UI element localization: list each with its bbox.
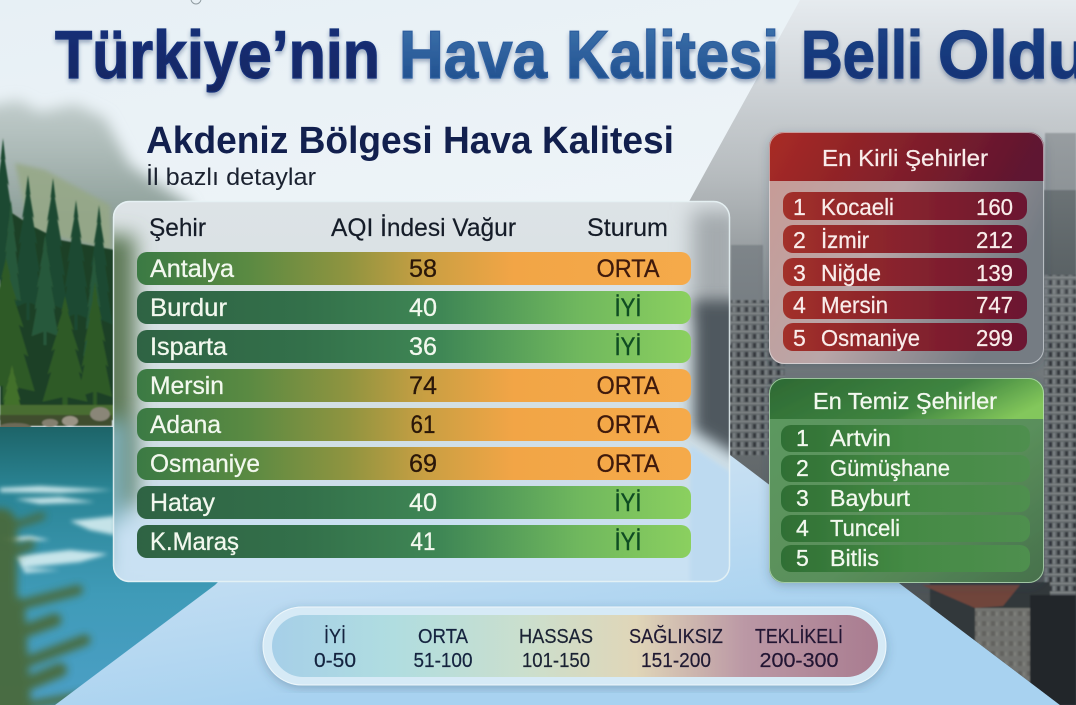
row 2 (783, 225, 1027, 253)
title: Türkiye’nin (55, 17, 380, 93)
row: Antalya: 58 (409, 255, 437, 283)
row: Burdur (137, 291, 691, 324)
legend item: HASSAS (519, 626, 593, 672)
row: Isparta: İYİ (614, 332, 642, 361)
legend item: HASSAS: HASSAS (519, 626, 593, 648)
row: Osmaniye: Osmaniye (150, 450, 260, 478)
row 4: Mersin (821, 292, 888, 318)
legend item: İYİ: İYİ (324, 625, 346, 648)
table header: AQI İndesi Vağur (331, 213, 516, 242)
legend item: SAĞLIKSIZ: SAĞLIKSIZ (629, 625, 723, 648)
row: Isparta: Isparta (150, 333, 227, 361)
table header (149, 213, 668, 242)
panel: most polluted cities (769, 132, 1044, 364)
row: K.Maraş (137, 525, 691, 558)
legend item: ORTA: 51-100 (414, 650, 472, 672)
row: K.Maraş: İYİ (614, 527, 642, 556)
lake (0, 427, 218, 705)
row: Adana: ORTA (596, 411, 660, 439)
table header: Sturum (587, 214, 668, 242)
row 5 (781, 545, 1030, 572)
foreground pine (0, 516, 105, 705)
panel: city table (95, 201, 745, 590)
panel body (769, 132, 1044, 364)
row: Hatay: İYİ (614, 488, 642, 517)
row 5: 5 (793, 325, 806, 351)
fog (680, 0, 1076, 705)
row 1: 1 (796, 425, 809, 451)
row: Mersin: 74 (409, 372, 437, 400)
row 4 (783, 291, 1027, 319)
legend item: TEKLİKELİ: TEKLİKELİ (755, 625, 843, 648)
icon: faint top logo (191, 0, 201, 4)
row 4: 4 (793, 292, 806, 318)
row 5: Osmaniye (821, 325, 920, 351)
row 1: 1 (793, 194, 806, 220)
row: Osmaniye (137, 447, 691, 480)
glass background (95, 201, 745, 590)
panel: cleanest cities (769, 378, 1044, 583)
panel body (769, 378, 1044, 583)
row: Osmaniye: 69 (409, 450, 437, 478)
row 2: Gümüşhane (830, 455, 950, 481)
row 5: Bitlis (830, 545, 879, 571)
row 5 (783, 323, 1027, 351)
row: Burdur: Burdur (150, 294, 227, 322)
row 3: Niğde (821, 260, 881, 286)
row 3: 139 (976, 260, 1013, 286)
panel heading: En Kirli Şehirler (822, 145, 988, 171)
row 1: 160 (976, 194, 1013, 220)
table header: Şehir (149, 214, 206, 242)
legend item: HASSAS: 101-150 (522, 650, 590, 672)
legend item: ORTA (414, 626, 472, 672)
title: Kalitesi (566, 17, 779, 93)
row: Hatay: 40 (409, 489, 437, 517)
row: Hatay: Hatay (150, 489, 215, 517)
row 3: Bayburt (830, 485, 911, 511)
meadow slope (15, 163, 112, 250)
row 3: 3 (793, 260, 806, 286)
row: Antalya: ORTA (596, 255, 660, 283)
title: Belli (801, 17, 923, 93)
legend item: SAĞLIKSIZ: 151-200 (641, 650, 711, 672)
row: Adana: Adana (150, 411, 221, 439)
row: Adana: 61 (410, 411, 436, 439)
row: Hatay (137, 486, 691, 519)
row 2 (781, 455, 1030, 482)
heading: region: Akdeniz Bölgesi Hava Kalitesi (146, 120, 674, 162)
legend item: SAĞLIKSIZ (629, 625, 723, 672)
legend item: İYİ (314, 625, 356, 672)
subheading: İl bazlı detaylar (146, 164, 316, 191)
haze (731, 132, 1076, 312)
title (55, 17, 1076, 93)
legend item: ORTA: ORTA (418, 626, 469, 648)
row 2: 2 (793, 227, 806, 253)
photo: mountains, forest and lake (0, 96, 218, 705)
row 4 (781, 515, 1030, 542)
row: Isparta (137, 330, 691, 363)
legend item: TEKLİKELİ (755, 625, 843, 672)
row: Antalya: Antalya (150, 255, 234, 283)
row: Mersin: ORTA (596, 372, 660, 400)
row 4: Tunceli (830, 515, 900, 541)
row 4: 4 (796, 515, 809, 541)
row 1 (781, 425, 1030, 452)
row 3 (781, 485, 1030, 512)
forest (0, 138, 115, 420)
shoreline rocks (0, 406, 113, 427)
row 5: 299 (976, 325, 1013, 351)
row: Antalya (137, 252, 691, 285)
legend: AQI scale (263, 607, 886, 685)
row: Adana (137, 408, 691, 441)
water highlights (0, 486, 115, 573)
row: K.Maraş: K.Maraş (150, 528, 239, 556)
row 1: Kocaeli (821, 194, 894, 220)
row: Burdur: İYİ (614, 293, 642, 322)
row 2: 212 (976, 227, 1013, 253)
legend item: İYİ: 0-50 (314, 650, 356, 672)
title: Hava (399, 17, 548, 93)
mountain (0, 100, 195, 290)
row: K.Maraş: 41 (410, 528, 436, 556)
row 1 (783, 192, 1027, 220)
row 1: Artvin (830, 425, 891, 451)
row 2: 2 (796, 455, 809, 481)
row: Osmaniye: ORTA (596, 450, 660, 478)
row: Burdur: 40 (409, 294, 437, 322)
row: Isparta: 36 (409, 333, 437, 361)
row 3 (783, 258, 1027, 286)
row: Mersin: Mersin (150, 372, 224, 400)
row 5: 5 (796, 545, 809, 571)
city background (680, 0, 1076, 705)
buildings (725, 133, 1076, 705)
panel heading: En Temiz Şehirler (813, 388, 997, 414)
row 4: 747 (976, 292, 1013, 318)
legend item: TEKLİKELİ: 200-300 (760, 650, 838, 672)
row 3: 3 (796, 485, 809, 511)
row 2: İzmir (821, 227, 869, 253)
row: Mersin (137, 369, 691, 402)
